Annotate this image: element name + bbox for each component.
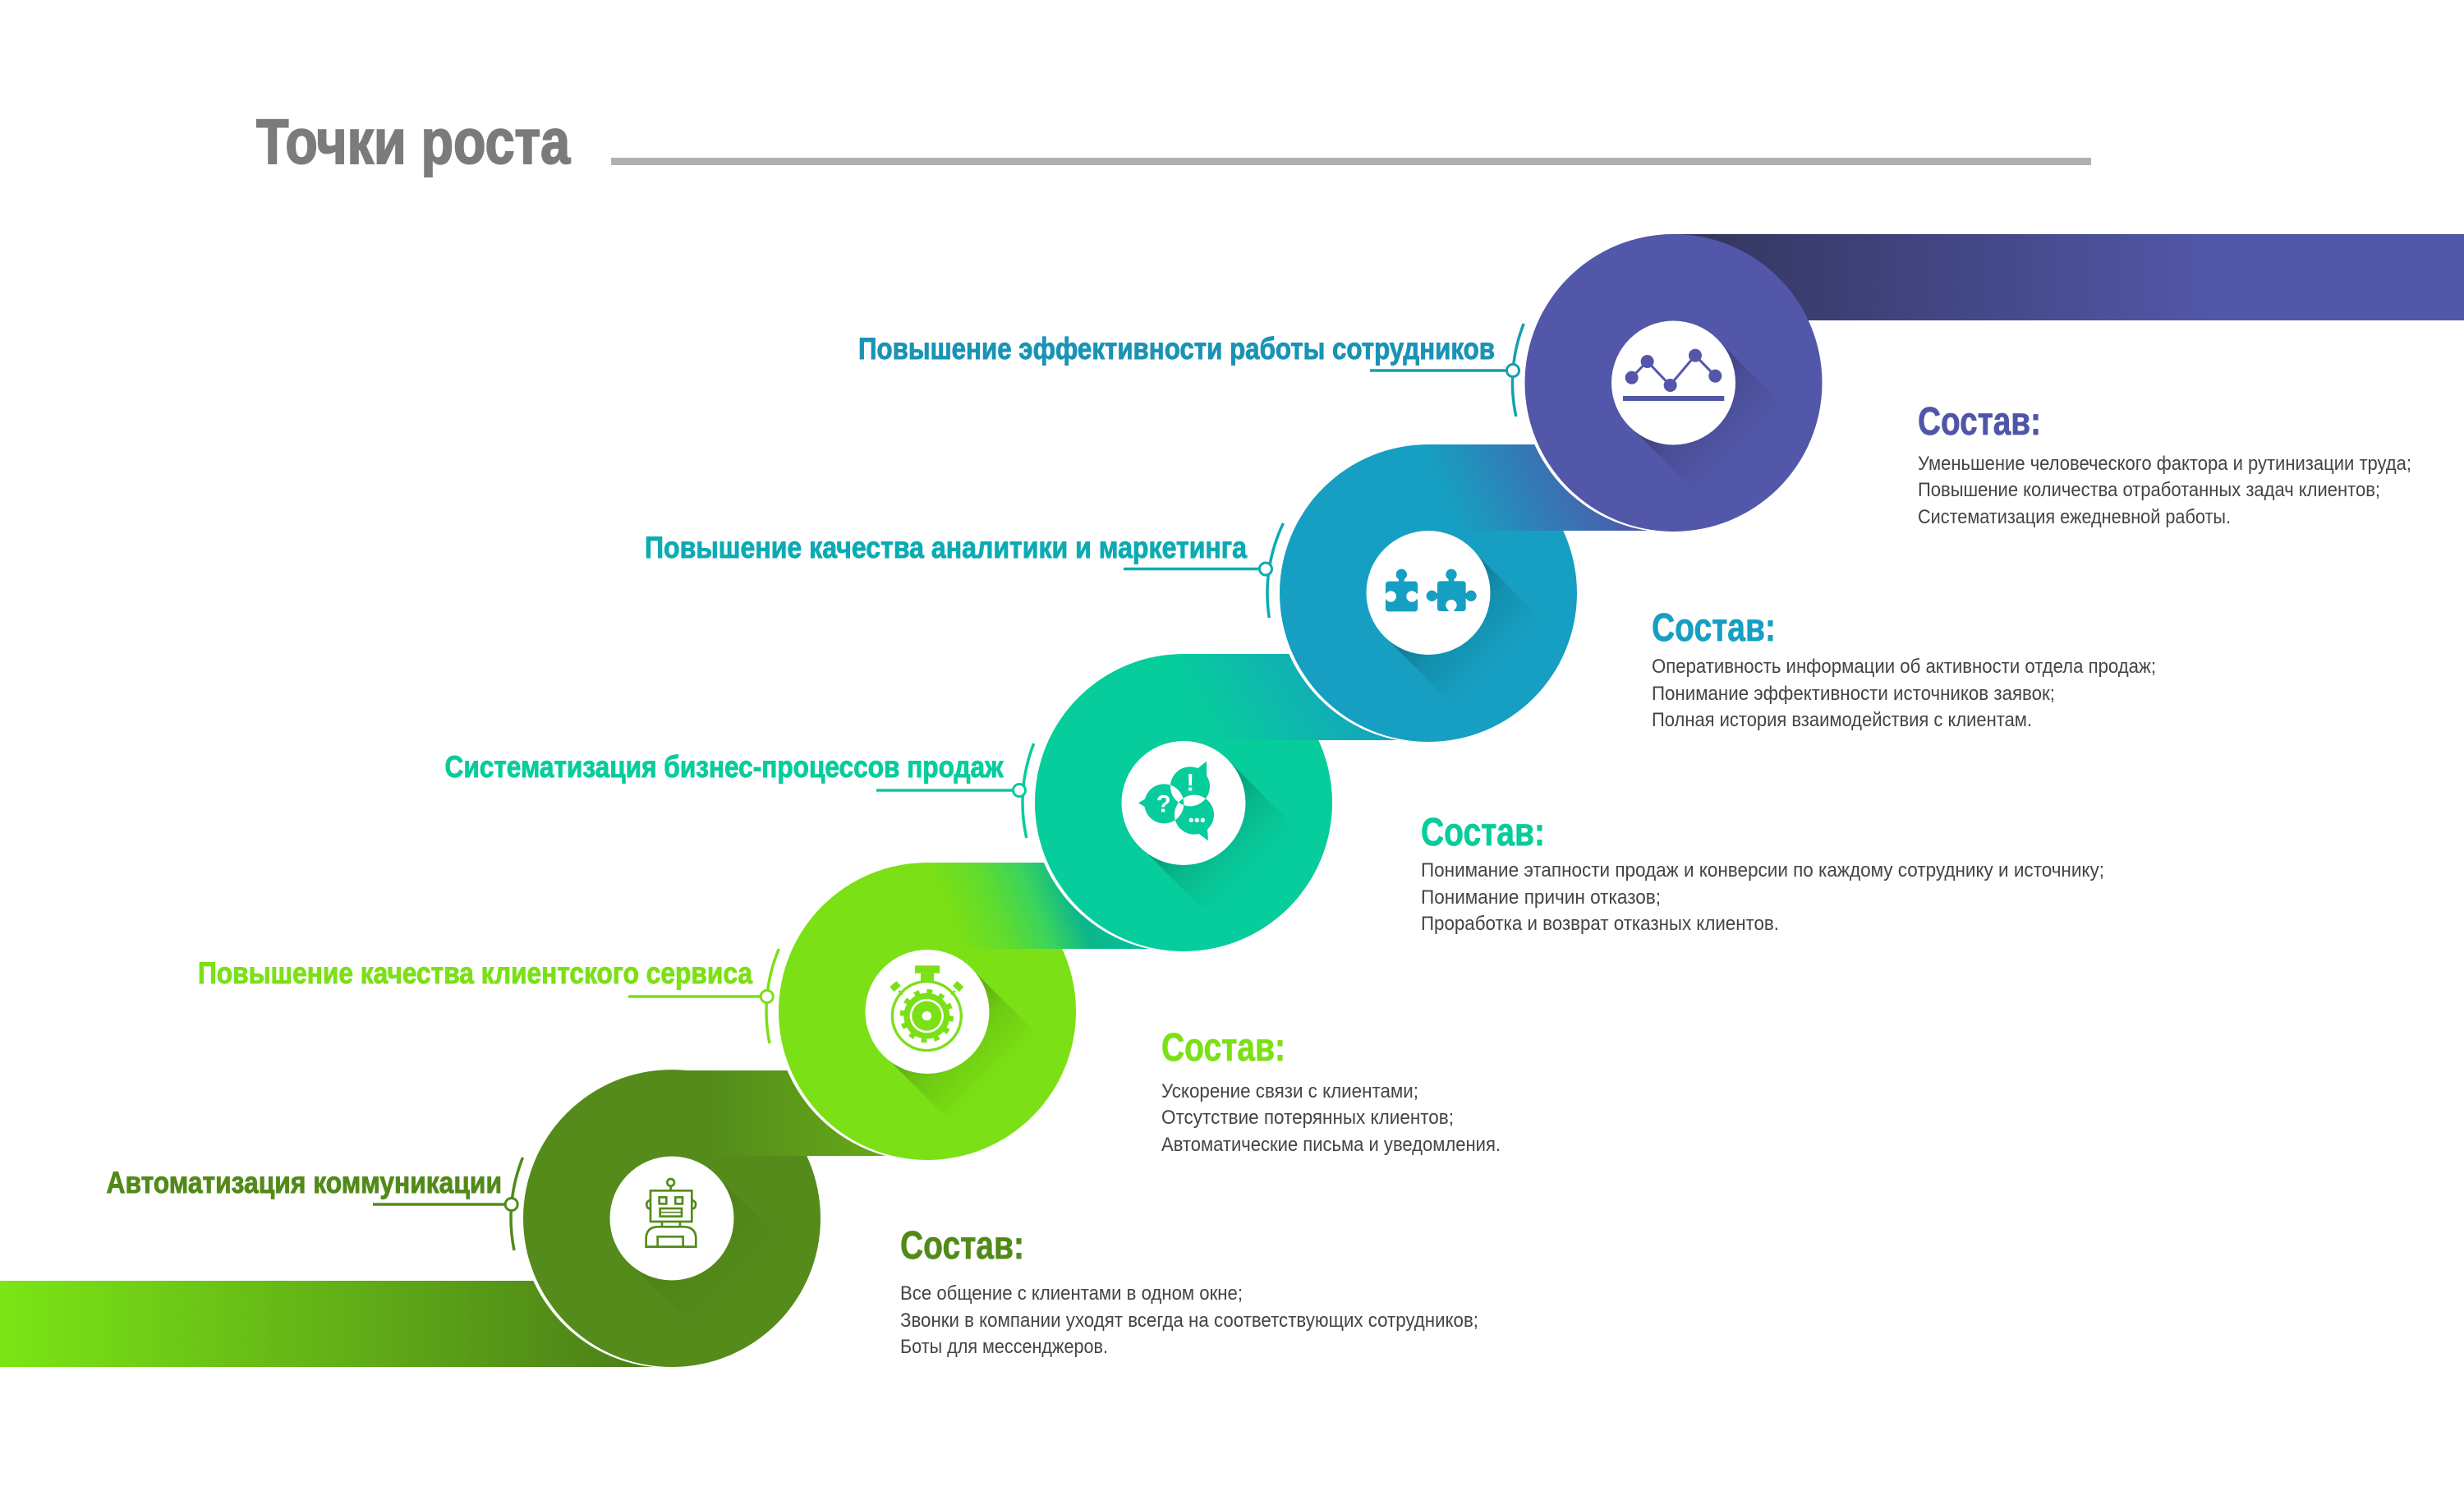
details: step 2: Состав:	[1161, 1026, 1285, 1070]
details: step 3	[1421, 811, 2104, 935]
details: step 3: Понимание этапности продаж и конверсии по каждому сотруднику и источнику;	[1421, 859, 2104, 881]
details: step 5: Уменьшение человеческого фактора и рутинизации труда;	[1918, 453, 2411, 475]
details: step 4	[1652, 606, 2156, 731]
label: step 5	[858, 324, 1524, 417]
ribbon: step 3 to step 4	[1184, 654, 1428, 740]
ribbon: exit band	[1673, 234, 2464, 320]
step 2 disc	[775, 863, 1076, 1161]
title: Точки роста	[256, 107, 571, 177]
details: step 5: Систематизация ежедневной работы.	[1918, 506, 2231, 528]
icon: speech bubbles: !	[1186, 769, 1194, 796]
details: step 2: Ускорение связи с клиентами;	[1161, 1080, 1418, 1102]
ribbon: step 2 to step 3	[927, 863, 1184, 949]
details: step 4: Состав:	[1652, 606, 1776, 650]
label: step 1: Автоматизация коммуникации	[107, 1166, 502, 1199]
icon: speech bubbles	[1138, 762, 1214, 840]
details: step 3: Понимание причин отказов;	[1421, 886, 1661, 909]
ribbon: entry band	[0, 1281, 672, 1367]
step 3 disc	[1032, 654, 1332, 952]
icon: robot	[646, 1179, 696, 1247]
details: step 5: Состав:	[1918, 400, 2041, 444]
details: step 5	[1918, 400, 2411, 528]
label: step 5: Повышение эффективности работы сотрудников	[858, 332, 1495, 366]
label: step 4: Повышение качества аналитики и маркетинга	[645, 531, 1247, 564]
details: step 4: Понимание эффективности источников заявок;	[1652, 683, 2055, 705]
details: step 1: Боты для мессенджеров.	[900, 1336, 1108, 1358]
details: step 1: Звонки в компании уходят всегда на соответствующих сотрудников;	[900, 1310, 1478, 1332]
details: step 3: Проработка и возврат отказных клиентов.	[1421, 913, 1779, 935]
icon: line chart	[1623, 349, 1724, 401]
details: step 3: Состав:	[1421, 811, 1545, 854]
label: step 1	[107, 1158, 522, 1250]
ribbon: step 4 to step 5	[1428, 444, 1673, 531]
details: step 2: Автоматические письма и уведомления.	[1161, 1134, 1501, 1156]
step 1 disc	[520, 1070, 821, 1368]
details: step 1: Все общение с клиентами в одном окне;	[900, 1282, 1243, 1305]
title rule	[611, 158, 2091, 165]
details: step 1: Состав:	[900, 1224, 1024, 1268]
details: step 2	[1161, 1026, 1501, 1156]
label: step 2: Повышение качества клиентского сервиса	[198, 956, 752, 990]
label: step 3	[445, 743, 1034, 838]
icon: stopwatch gear	[890, 965, 963, 1051]
details: step 4: Полная история взаимодействия с клиентам.	[1652, 709, 2032, 731]
icon: puzzle pieces	[1384, 569, 1477, 612]
details: step 1	[900, 1224, 1478, 1358]
ribbon: step 1 to step 2	[672, 1070, 927, 1156]
icon: speech bubbles: ?	[1156, 790, 1171, 817]
step 4 disc	[1276, 444, 1577, 743]
details: step 5: Повышение количества отработанных задач клиентов;	[1918, 479, 2380, 501]
details: step 4: Оперативность информации об активности отдела продаж;	[1652, 656, 2156, 678]
label: step 3: Систематизация бизнес-процессов продаж	[445, 750, 1004, 784]
label: step 2	[198, 949, 779, 1043]
label: step 4	[645, 523, 1283, 618]
step 5 disc	[1521, 234, 1822, 532]
details: step 2: Отсутствие потерянных клиентов;	[1161, 1107, 1454, 1129]
